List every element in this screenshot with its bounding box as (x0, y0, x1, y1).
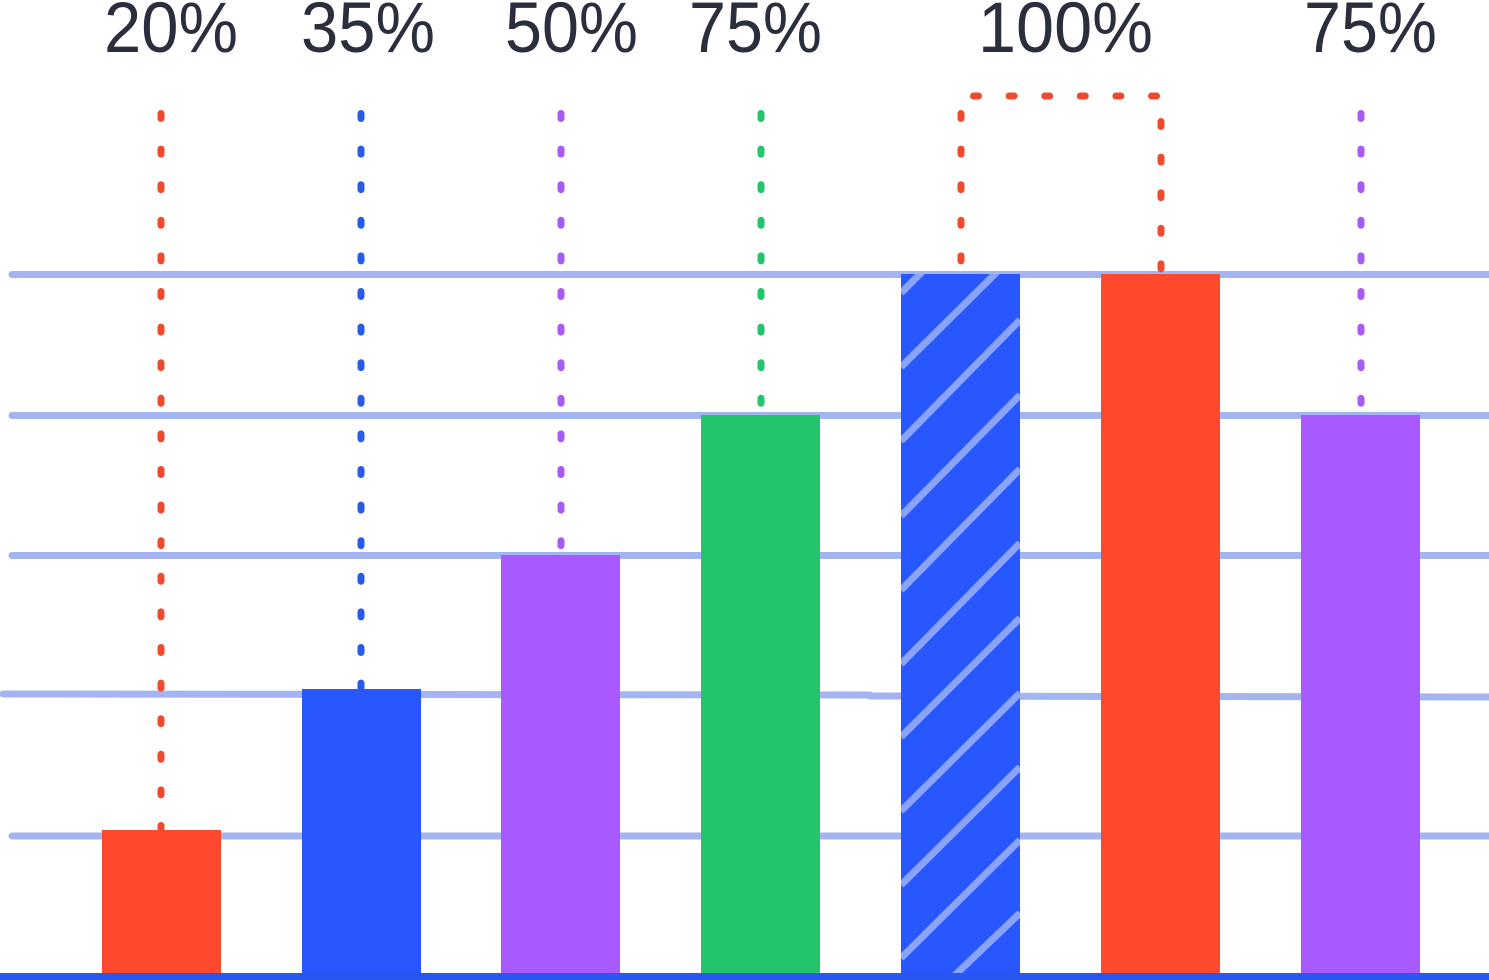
bar: 50% purple (501, 555, 620, 973)
grid lines (3, 274, 1489, 836)
bar: 100% striped blue (901, 269, 1020, 978)
dotted bracket: 100% (961, 96, 1161, 274)
bar: 100% red (1101, 274, 1220, 973)
baseline (0, 973, 1489, 980)
dotted leader: 75% purple (1358, 114, 1364, 415)
bar: 75% green (701, 415, 820, 973)
bar: 20% red (102, 830, 221, 973)
dotted leader: 75% green (758, 114, 764, 415)
bar: 35% blue (302, 689, 421, 973)
dotted leader: 35% (358, 114, 364, 689)
bar: 75% purple (1301, 415, 1420, 973)
dotted leader: 50% (558, 114, 564, 555)
dotted leader: 20% (158, 114, 164, 830)
